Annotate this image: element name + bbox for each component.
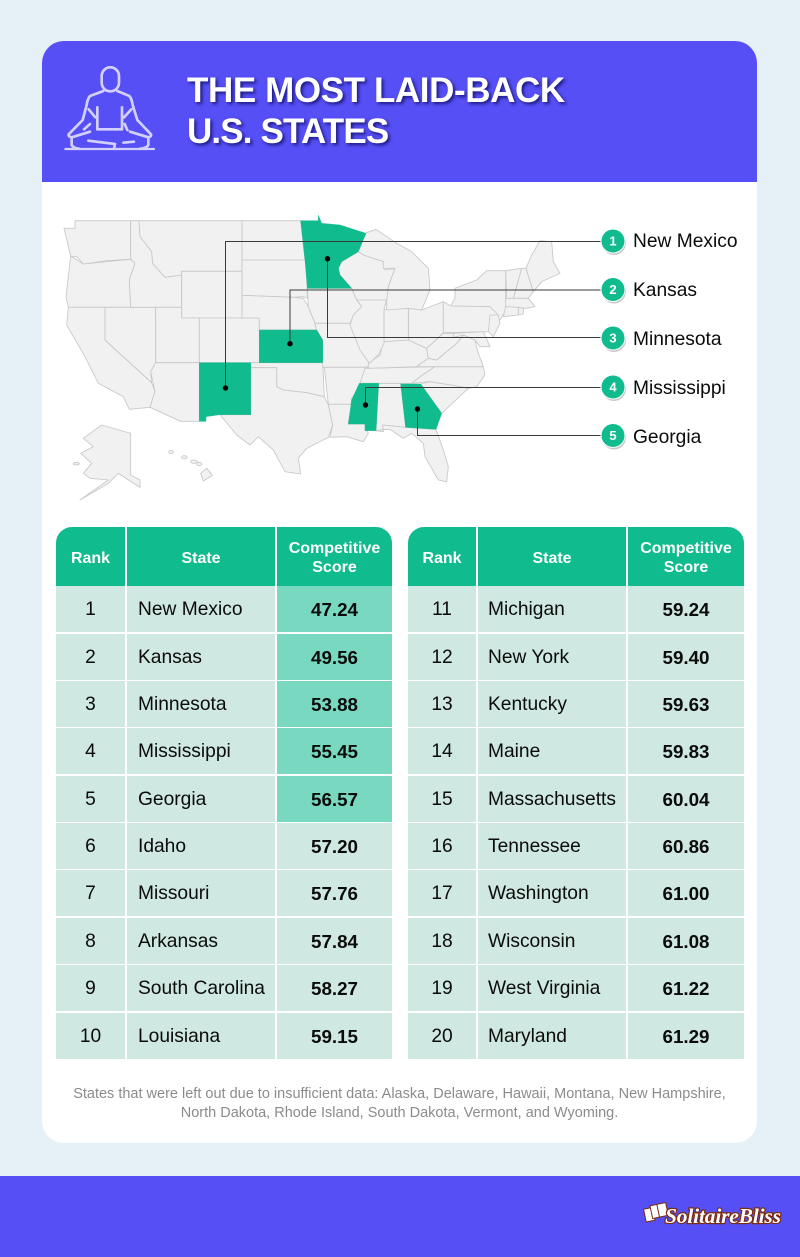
footnote	[73, 1086, 726, 1121]
table: ranks 1-10: South Carolina	[138, 978, 265, 999]
logo: Solitaire Bliss: SolitaireBliss	[665, 1204, 781, 1228]
table: ranks 1-10: Rank	[71, 550, 110, 566]
state: Mississippi	[348, 383, 379, 431]
table: ranks 1-10: 6	[85, 836, 96, 857]
map with legend	[64, 215, 738, 500]
table: ranks 1-10: Kansas	[138, 647, 202, 668]
table: ranks 1-10: 9	[85, 978, 96, 999]
legend labels: Minnesota	[633, 329, 722, 350]
table: ranks 1-10: Missouri	[138, 883, 209, 904]
state: Kansas	[259, 330, 323, 363]
table: ranks 11-20: Massachusetts	[488, 789, 616, 810]
footnote: States that were left out due to insufficient data: Alaska, Delaware, Hawaii, Montana, New Hampshire,	[73, 1086, 726, 1102]
table: ranks 11-20: 13	[431, 694, 453, 715]
legend labels: Georgia	[633, 427, 702, 448]
legend badges	[601, 229, 626, 450]
table: ranks 1-10: New Mexico	[138, 599, 242, 620]
table: ranks 11-20: 61.29	[662, 1026, 710, 1047]
header band	[42, 41, 757, 182]
table: ranks 11-20: 61.08	[662, 931, 710, 952]
table: ranks 11-20: 20	[431, 1026, 453, 1047]
table: ranks 11-20: 11	[432, 599, 452, 620]
table: ranks 11-20: 17	[431, 883, 453, 904]
table: ranks 11-20: 19	[431, 978, 453, 999]
table: ranks 11-20: 60.04	[662, 789, 710, 810]
table: ranks 1-10: Competitive	[289, 540, 380, 557]
table: ranks 1-10: 47.24	[311, 599, 358, 620]
table: ranks 11-20: 16	[431, 836, 453, 857]
table: ranks 1-10: Idaho	[138, 836, 186, 857]
table: ranks 11-20: Competitive	[640, 540, 732, 557]
table: ranks 1-10: 5	[85, 789, 96, 810]
table: ranks 1-10: 57.20	[311, 836, 358, 857]
table: ranks 11-20: Rank	[422, 550, 462, 566]
state: New Mexico	[199, 363, 251, 421]
title: U.S. STATES	[187, 112, 388, 151]
table: ranks 1-10: Louisiana	[138, 1026, 220, 1047]
table: ranks 11-20: Michigan	[488, 599, 565, 620]
table: ranks 1-10: 55.45	[311, 741, 358, 762]
legend labels: Mississippi	[633, 378, 726, 399]
table: ranks 11-20: 61.22	[662, 978, 710, 999]
table: ranks 11-20	[408, 527, 744, 1059]
table: ranks 1-10: Mississippi	[138, 741, 231, 762]
table: ranks 1-10: 8	[85, 931, 96, 952]
table: ranks 11-20: 14	[431, 741, 453, 762]
table: ranks 11-20: 59.63	[662, 694, 710, 715]
table: ranks 1-10: 59.15	[311, 1026, 358, 1047]
legend badges: 3	[609, 330, 617, 346]
footnote: North Dakota, Rhode Island, South Dakota, Vermont, and Wyoming.	[181, 1105, 618, 1121]
US map	[64, 221, 560, 500]
table: ranks 1-10: 7	[85, 883, 96, 904]
table: ranks 1-10: State	[181, 550, 221, 566]
legend labels	[633, 231, 738, 448]
table: ranks 11-20: Tennessee	[488, 836, 581, 857]
table: ranks 1-10: 10	[80, 1026, 101, 1047]
legend labels: New Mexico	[633, 231, 738, 252]
table: ranks 1-10	[56, 527, 392, 1059]
title: THE MOST LAID-BACK	[187, 71, 565, 110]
table: ranks 1-10: Score	[312, 559, 357, 576]
table: ranks 11-20: West Virginia	[488, 978, 600, 999]
legend badges: 2	[609, 282, 617, 297]
table: ranks 11-20: 18	[431, 931, 453, 952]
legend labels: Kansas	[633, 280, 697, 301]
title	[187, 71, 568, 151]
table: ranks 11-20: Washington	[488, 883, 589, 904]
table: ranks 1-10: Minnesota	[138, 694, 227, 715]
table: ranks 11-20: New York	[488, 647, 569, 668]
white card	[42, 41, 757, 1143]
table: ranks 11-20: Kentucky	[488, 694, 567, 715]
table: ranks 1-10: 1	[85, 599, 96, 620]
table: ranks 1-10: 57.84	[311, 931, 358, 952]
table: ranks 1-10: 49.56	[311, 647, 358, 668]
legend badges: 5	[609, 428, 617, 443]
highlighted states	[199, 215, 442, 431]
table: ranks 11-20: Score	[664, 559, 708, 576]
table: ranks 11-20: State	[532, 550, 572, 566]
table: ranks 11-20: Maryland	[488, 1026, 567, 1047]
table: ranks 11-20: 59.83	[662, 741, 710, 762]
table: ranks 1-10: 2	[85, 647, 96, 668]
table: ranks 1-10: 53.88	[311, 694, 358, 715]
table: ranks 1-10: 56.57	[311, 789, 358, 810]
table: ranks 11-20: 15	[431, 789, 453, 810]
footer band	[0, 1176, 800, 1257]
connector lines	[226, 242, 605, 436]
state: Minnesota	[301, 215, 366, 288]
table: ranks 1-10: 57.76	[311, 883, 358, 904]
table: ranks 11-20: 59.40	[662, 647, 710, 668]
table: ranks 11-20: 61.00	[662, 883, 710, 904]
table: ranks 11-20: 60.86	[662, 836, 710, 857]
table: ranks 1-10: 3	[85, 694, 96, 715]
state: Georgia	[401, 384, 442, 429]
table: ranks 1-10: Georgia	[138, 789, 206, 810]
table: ranks 11-20: 59.24	[662, 599, 710, 620]
table: ranks 11-20: Maine	[488, 741, 540, 762]
table: ranks 1-10: 4	[85, 741, 96, 762]
map markers	[223, 256, 420, 412]
icon: meditating person	[64, 66, 156, 150]
table: ranks 1-10: 58.27	[311, 978, 358, 999]
legend badges: 4	[609, 380, 617, 394]
table: ranks 11-20: 12	[431, 647, 453, 668]
table: ranks 1-10: Arkansas	[138, 931, 218, 952]
legend badges: 1	[609, 234, 617, 248]
table: ranks 11-20: Wisconsin	[488, 931, 575, 952]
